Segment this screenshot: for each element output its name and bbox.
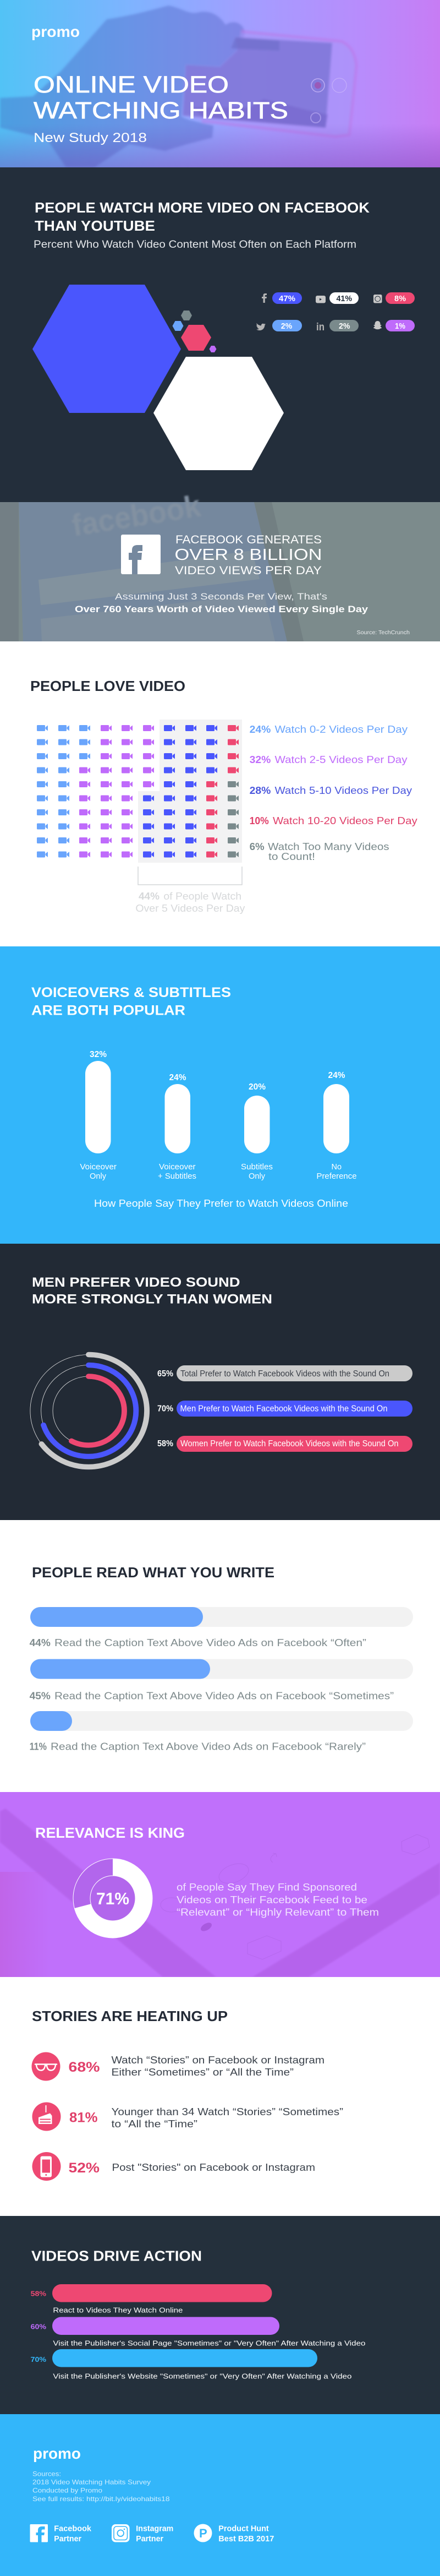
title: WATCHING HABITS [34,97,288,124]
bar chart: Only [90,1172,107,1181]
label: 6% [250,841,389,862]
icon: phone [32,2152,61,2181]
photo: blurred facebook login [0,488,304,641]
badge: instagram: Instagram [136,2525,173,2534]
stat text [175,533,322,577]
label: 10%: 10% [250,815,269,826]
label: 6%: 6% [250,841,265,852]
legend: women: Women Prefer to Watch Facebook Videos with the Sound On [180,1439,398,1448]
legend: snapchat: 1% [395,322,405,331]
heading: VIDEOS DRIVE ACTION [31,2247,202,2264]
bar: social page: 60% [31,2323,46,2331]
panel: voiceovers and subtitles [0,946,440,1244]
bar chart: 32% [90,1050,107,1059]
heading: STORIES ARE HEATING UP [32,2008,228,2024]
bar: website: Visit the Publisher's Website "Sometimes" or "Very Often" After Watching a Video [53,2372,351,2381]
badge: product hunt [194,2524,274,2544]
label: 6%: Watch Too Many Videos [268,841,389,852]
heading: MEN PREFER VIDEO SOUND [32,1275,240,1290]
legend: snapchat [373,320,415,331]
panel: videos drive action [0,2216,440,2414]
panel: platforms [0,167,440,502]
legend: men: Men Prefer to Watch Facebook Videos with the Sound On [180,1404,387,1414]
bar chart: Only [249,1172,266,1181]
bracket label: of People Watch [163,891,241,902]
bar: often [30,1607,413,1627]
stat: 52% [68,2160,315,2176]
legend: facebook [262,292,302,304]
title: ONLINE VIDEO [34,72,229,98]
stat: 81%: Younger than 34 Watch “Stories” “Sometimes” [111,2106,343,2117]
bar chart: 24% [328,1071,345,1080]
heading: MORE STRONGLY THAN WOMEN [32,1292,272,1307]
label: 32%: 32% [250,754,271,765]
legend: total: Total Prefer to Watch Facebook Videos with the Sound On [180,1369,389,1379]
label: 10%: Watch 10-20 Videos Per Day [273,815,418,826]
description: “Relevant” or “Highly Relevant” to Them [177,1907,379,1918]
icon grid: purple [79,725,154,858]
sources: Sources: [32,2470,61,2477]
bar: social page [31,2317,365,2348]
badge: facebook [30,2524,92,2544]
bracket label: 44% [139,891,160,902]
bracket [138,867,242,885]
stat: 52%: Post "Stories" on Facebook or Instagram [112,2162,315,2173]
donut chart: 71% [96,1889,129,1908]
heading: PEOPLE LOVE VIDEO [30,678,185,694]
bar chart: 24% [169,1073,186,1082]
bar chart: Voiceover [159,1163,196,1172]
chart caption: How People Say They Prefer to Watch Videos Online [94,1197,348,1209]
heading [35,199,370,234]
label: 28%: Watch 5-10 Videos Per Day [275,785,413,796]
stat text: OVER 8 BILLION [175,546,322,564]
heading: VOICEOVERS & SUBTITLES [31,985,231,1000]
donut chart [73,1859,152,1938]
legend: youtube: 41% [337,294,352,303]
bar: react: 58% [31,2290,46,2298]
bar chart: Preference [317,1172,356,1181]
legend: men [157,1401,413,1417]
badge: instagram: Partner [136,2535,163,2544]
badge: product hunt: Best B2B 2017 [218,2535,274,2544]
legend: linkedin: in [316,322,324,333]
legend: instagram: 8% [394,294,406,303]
stat: 81% [69,2106,343,2130]
stat: 68%: 68% [68,2060,100,2075]
panel: relevance [0,1792,440,1977]
bracket label: Over 5 Videos Per Day [135,903,245,914]
highlight background [138,720,242,863]
panel: men vs women sound [0,1244,440,1520]
logo: promo: promo [33,2445,81,2462]
heading: PEOPLE WATCH MORE VIDEO ON FACEBOOK [35,199,370,216]
label: 28%: 28% [250,785,271,796]
bar chart: + Subtitles [158,1172,196,1181]
stat: 68%: Watch “Stories” on Facebook or Instagram [111,2055,324,2066]
stat text: VIDEO VIEWS PER DAY [175,564,322,577]
legend: women: 58% [157,1439,173,1448]
stat text: FACEBOOK GENERATES [175,533,322,546]
heading: THAN YOUTUBE [35,217,155,234]
icon: facebook logo [121,535,161,574]
label: 32%: Watch 2-5 Videos Per Day [275,754,408,765]
radial chart [30,1354,147,1467]
bar chart: Voiceover [80,1163,117,1172]
badge: instagram [112,2524,173,2544]
bar: rarely [30,1711,413,1731]
label: 24%: 24% [250,723,271,735]
legend: instagram [373,292,415,304]
hexagon chart [32,285,284,470]
bar: website: 70% [31,2356,46,2363]
heading: RELEVANCE IS KING [35,1825,185,1841]
photo: blurred phone [0,1809,440,1977]
bar chart: Subtitles [241,1163,273,1172]
subheading: Percent Who Watch Video Content Most Often on Each Platform [34,239,356,250]
legend: linkedin: 2% [339,322,350,331]
label: often: 44% [30,1637,51,1648]
badge: facebook: Facebook [54,2525,92,2534]
badge: product hunt: Product Hunt [218,2525,269,2534]
label: sometimes: 45% [30,1690,51,1701]
panel: people read [0,1520,440,1792]
heading [32,1275,272,1307]
heading: ARE BOTH POPULAR [31,1003,185,1019]
legend: women [157,1436,413,1452]
legend: youtube [316,292,359,304]
bracket label [135,891,245,914]
stat: 81%: to “All the “Time” [111,2118,197,2130]
badge: product hunt: P [199,2526,207,2540]
bar: react [31,2284,272,2314]
bar: social page: Visit the Publisher's Social Page "Sometimes" or "Very Often" After Watching a Video [53,2339,365,2348]
label: 6%: to Count! [268,851,315,862]
bar: react: React to Videos They Watch Online [53,2306,183,2314]
legend: men: 70% [157,1404,173,1414]
panel: header [0,0,440,167]
panel: footer [0,2414,440,2576]
description: of People Say They Find Sponsored [177,1882,357,1893]
legend: twitter [256,320,302,331]
bar chart: 20% [249,1082,266,1092]
subtitle: New Study 2018 [34,130,147,145]
legend: linkedin [316,320,359,333]
panel: facebook stat [0,488,440,641]
label: sometimes: Read the Caption Text Above Video Ads on Facebook “Sometimes” [54,1690,394,1701]
source: Source: TechCrunch [356,629,410,636]
sources: 2018 Video Watching Habits Survey [32,2479,151,2486]
legend: facebook: 47% [279,294,295,303]
caption: Over 760 Years Worth of Video Viewed Every Single Day [75,604,369,614]
bar: website [31,2349,351,2381]
photo: blurred facebook login: facebook [69,488,204,543]
bar: sometimes [30,1659,413,1679]
photo: hand holding phone [0,6,356,167]
legend: twitter: 2% [281,322,292,331]
label: often: Read the Caption Text Above Video Ads on Facebook “Often” [54,1637,366,1648]
icon grid: grey [228,781,239,858]
caption: Assuming Just 3 Seconds Per View, That's [115,591,327,602]
badge: facebook: Partner [54,2535,81,2544]
icon: glasses [32,2052,61,2081]
sources [32,2470,170,2503]
panel: stories [0,1977,440,2216]
icon grid: light blue [37,725,90,858]
icon grid: pink [206,725,239,858]
panel: people love video [0,641,440,946]
stat: 68% [68,2055,324,2078]
legend: total: 65% [157,1369,173,1379]
bar chart: No [331,1163,342,1172]
description: Videos on Their Facebook Feed to be [177,1894,367,1905]
label: rarely: Read the Caption Text Above Video Ads on Facebook “Rarely” [51,1741,366,1752]
icon grid: indigo [143,725,217,858]
label: rarely: 11% [30,1741,47,1752]
stat: 52%: 52% [68,2160,100,2176]
description [177,1882,379,1918]
stat: 68%: Either “Sometimes” or “All the Time” [111,2067,294,2078]
stat: 81%: 81% [69,2110,98,2125]
heading: PEOPLE READ WHAT YOU WRITE [32,1564,274,1581]
title [34,72,288,124]
icon: cake [32,2102,61,2131]
label: 24%: Watch 0-2 Videos Per Day [275,723,408,735]
bar chart [80,1050,356,1181]
sources: See full results: http://bit.ly/videohabits18 [32,2495,170,2503]
caption [75,591,369,614]
sources: Conducted by Promo [32,2486,102,2494]
legend: total [157,1365,413,1381]
heading [31,985,231,1019]
logo: promo: promo [31,23,80,40]
